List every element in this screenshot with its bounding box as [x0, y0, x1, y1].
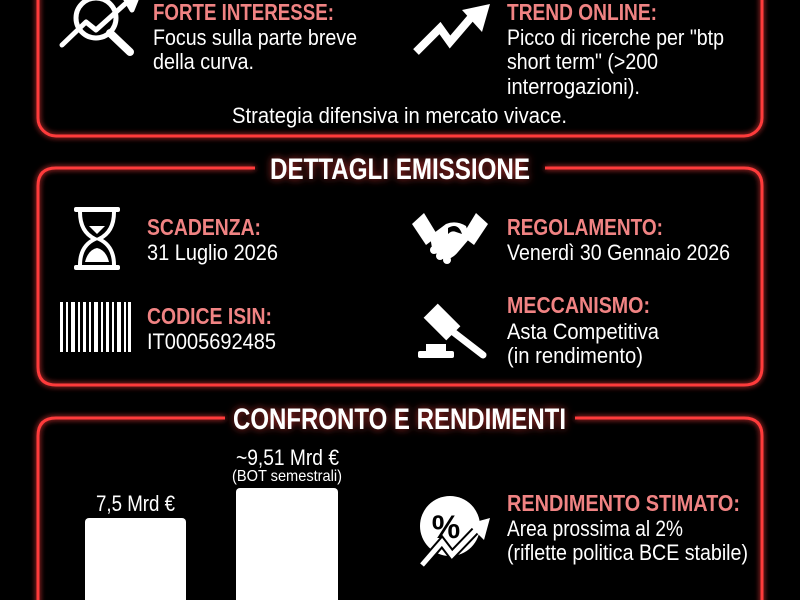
text: trend online: Picco di ricerche per "btp — [507, 25, 724, 50]
panel: market interest — [38, 0, 762, 136]
text: codice isin — [147, 303, 276, 354]
text: scadenza: SCADENZA: — [147, 214, 261, 240]
icon: handshake — [412, 213, 488, 264]
text: trend online: interrogazioni). — [507, 74, 640, 99]
icon: percent growth: % — [432, 509, 460, 545]
heading: dettagli emissione: DETTAGLI EMISSIONE — [270, 153, 530, 186]
text: forte interesse: Focus sulla parte breve — [153, 25, 357, 50]
heading: confronto e rendimenti: CONFRONTO E RENDIMENTI — [233, 403, 566, 436]
panel: confronto e rendimenti — [38, 403, 762, 600]
bar chart — [85, 445, 342, 600]
text: meccanismo: Asta Competitiva — [507, 319, 660, 344]
text: meccanismo: MECCANISMO: — [507, 292, 650, 318]
text: forte interesse: della curva. — [153, 49, 254, 74]
text: rendimento stimato: Area prossima al 2% — [507, 516, 683, 541]
text: regolamento: REGOLAMENTO: — [507, 214, 663, 240]
bar chart: 7,5 Mrd € — [96, 491, 175, 516]
icon: chart magnifier — [62, 0, 136, 52]
text: rendimento stimato: (riflette politica BCE stabile) — [507, 540, 748, 565]
text: codice isin: CODICE ISIN: — [147, 303, 272, 329]
bar chart: ~9,51 Mrd € — [236, 445, 339, 470]
text: trend online: short term" (>200 — [507, 49, 658, 74]
text: scadenza — [147, 214, 278, 265]
icon: barcode — [60, 302, 131, 352]
panel: dettagli emissione — [38, 153, 762, 385]
text: rendimento stimato: RENDIMENTO STIMATO: — [507, 490, 740, 516]
text: regolamento: Venerdì 30 Gennaio 2026 — [507, 240, 730, 265]
text: trend online — [507, 0, 724, 99]
text: meccanismo — [507, 292, 660, 368]
icon: hourglass — [74, 207, 120, 270]
text: regolamento — [507, 214, 730, 265]
icon: trend arrow — [416, 4, 490, 52]
bar chart: (BOT semestrali) — [232, 468, 342, 485]
text: rendimento stimato — [507, 490, 748, 565]
text: strategia: Strategia difensiva in mercato vivace. — [232, 103, 567, 128]
text: codice isin: IT0005692485 — [147, 329, 276, 354]
icon: gavel — [418, 304, 483, 358]
text: meccanismo: (in rendimento) — [507, 343, 643, 368]
text: scadenza: 31 Luglio 2026 — [147, 240, 278, 265]
text: forte interesse — [153, 0, 357, 74]
icon: percent growth — [420, 496, 490, 565]
